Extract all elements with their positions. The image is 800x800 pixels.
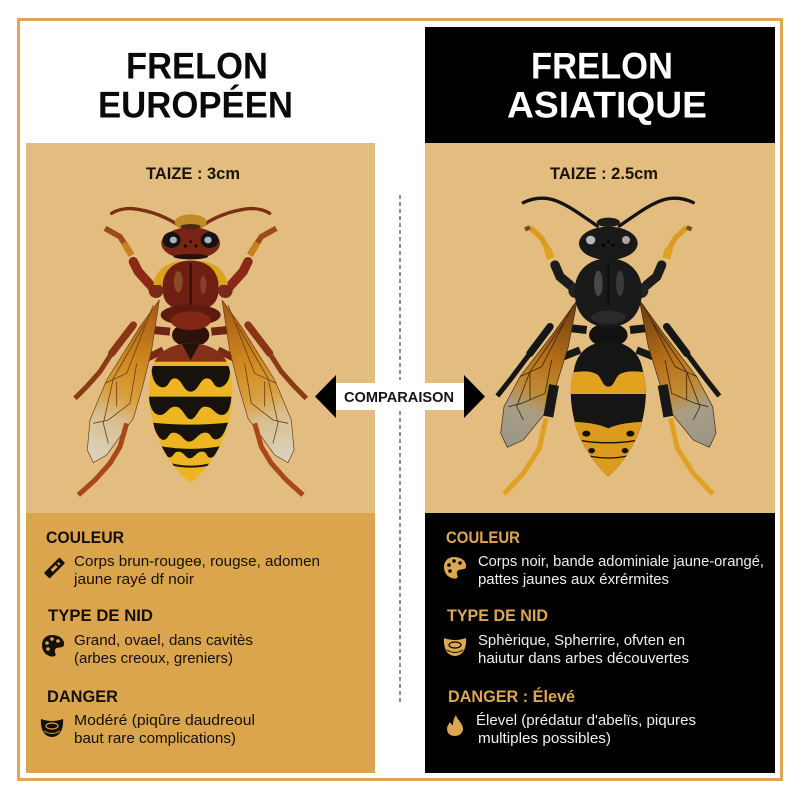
icon: flame — [447, 715, 463, 736]
section: couleur: Corps noir, bande adominiale jaune-orangé, — [478, 553, 764, 570]
section: danger: Modéré (piqûre daudreoul — [74, 712, 255, 729]
illustration: asian hornet — [497, 198, 719, 494]
icon: pencil — [44, 557, 65, 579]
section: danger: multiples possibles) — [478, 730, 611, 747]
illustration: european hornet — [75, 209, 306, 495]
section: type de nid: TYPE DE NID — [48, 607, 153, 625]
title: frelon asiatique — [507, 46, 707, 126]
size label: TAIZE : 2.5cm — [550, 165, 658, 183]
size label: TAIZE : 3cm — [146, 165, 240, 183]
section: danger — [448, 687, 696, 747]
section: couleur: COULEUR — [446, 529, 520, 547]
section: danger: baut rare complications) — [74, 730, 236, 747]
title: frelon asiatique: FRELON — [531, 46, 673, 86]
image panel background — [425, 143, 775, 513]
section: couleur: COULEUR — [46, 529, 124, 547]
title: frelon asiatique: ASIATIQUE — [507, 84, 707, 126]
info panel: asian — [425, 513, 775, 773]
section: danger: Élevel (prédatur d'abelïs, piqures — [476, 712, 696, 729]
comparison arrow: COMPARAISON — [344, 389, 454, 406]
section: type de nid: TYPE DE NID — [447, 607, 548, 625]
section: type de nid: (arbes creoux, greniers) — [74, 650, 233, 667]
section: danger — [47, 688, 255, 747]
icon: palette — [444, 557, 466, 579]
section: type de nid: Grand, ovael, dans cavitès — [74, 632, 253, 649]
title background — [425, 27, 775, 143]
section: danger: DANGER : Élevé — [448, 687, 575, 706]
title: frelon européen: FRELON — [126, 46, 268, 86]
section: couleur — [446, 529, 764, 588]
section: type de nid — [447, 607, 689, 667]
section: danger: DANGER — [47, 688, 118, 706]
center divider — [399, 195, 401, 705]
section: couleur: jaune rayé df noir — [73, 571, 194, 588]
icon: palette — [42, 635, 64, 657]
comparison arrow — [315, 375, 485, 418]
panel: frelon asiatique — [425, 27, 775, 773]
info panel: european — [26, 513, 375, 773]
panel: frelon européen — [26, 46, 375, 773]
section: couleur: Corps brun-rougeɵ, rougse, adomen — [74, 553, 320, 570]
section: type de nid — [48, 607, 253, 667]
icon: nest — [41, 719, 63, 737]
image panel background — [26, 143, 375, 513]
section: couleur — [46, 529, 320, 588]
section: type de nid: haiutur dans arbes découvertes — [478, 650, 689, 667]
section: type de nid: Sphèrique, Spherrire, ofvten en — [478, 632, 685, 649]
section: couleur: pattes jaunes aux éxrérmites — [478, 571, 669, 588]
title: frelon européen: EUROPÉEN — [98, 84, 293, 126]
icon: nest — [444, 638, 466, 656]
title: frelon européen — [98, 46, 293, 126]
